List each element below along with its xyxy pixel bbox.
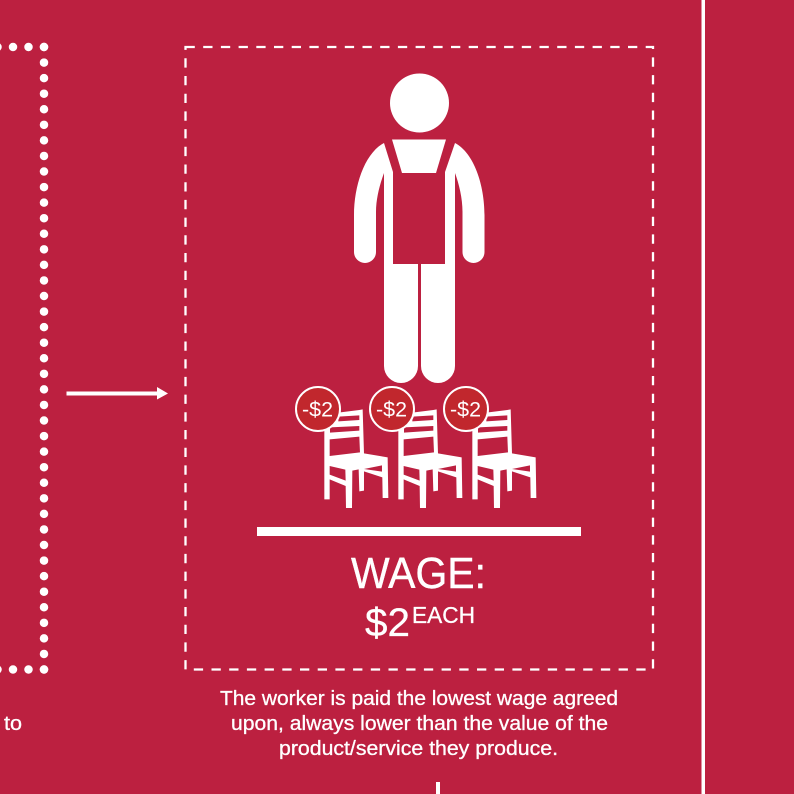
value: 2 dollars each: EACH — [412, 602, 475, 628]
badge: minus 2 dollars 1 — [296, 387, 340, 431]
badge: minus 2 dollars 1: -$2 — [302, 398, 333, 422]
badge: minus 2 dollars 2 — [370, 387, 414, 431]
worker head — [390, 74, 449, 132]
badge: minus 2 dollars 3: -$2 — [450, 398, 481, 422]
caption text — [220, 688, 618, 760]
arrow — [66, 387, 168, 400]
badge: minus 2 dollars 3 — [444, 387, 488, 431]
worker body — [354, 140, 484, 383]
panel: wage dashed frame — [186, 47, 653, 670]
panel: previous step dotted frame — [0, 47, 44, 670]
value: 2 dollars each — [365, 601, 475, 645]
caption text: The worker is paid the lowest wage agreed — [220, 688, 618, 710]
icon: chair 1 — [324, 409, 388, 508]
icon: worker with apron — [354, 74, 484, 383]
apron — [393, 173, 445, 264]
caption text: upon, always lower than the value of the — [231, 713, 608, 735]
icon: chair 3 — [472, 409, 536, 508]
value: 2 dollars each: $2 — [365, 601, 410, 645]
column divider line — [702, 0, 705, 794]
caption text: product/service they produce. — [279, 738, 558, 760]
heading: wage: WAGE: — [351, 549, 486, 598]
connector line — [436, 782, 440, 794]
divider bar — [257, 527, 581, 536]
badge: minus 2 dollars 2: -$2 — [376, 398, 407, 422]
text: cropped caption fragment: to — [4, 713, 22, 735]
icon: chair 2 — [398, 409, 462, 508]
